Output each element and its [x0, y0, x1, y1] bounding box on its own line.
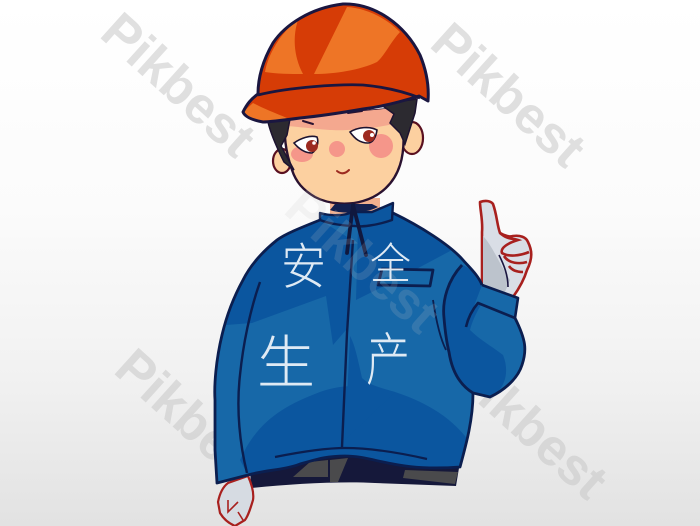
eyebrows [303, 111, 362, 124]
chest lettering 安全生产 [257, 226, 411, 400]
character 安: 安 [281, 226, 326, 299]
helmet highlight: centre [314, 7, 400, 74]
left eye [294, 136, 318, 153]
helmet brim line [258, 85, 420, 98]
trouser highlights [293, 458, 458, 484]
glove shadow [483, 236, 510, 292]
left ear [273, 149, 291, 173]
jacket outline [215, 213, 482, 483]
watermark: bottom right: Pikbest [442, 344, 618, 511]
right ear [401, 122, 423, 154]
helmet highlight: left [265, 20, 303, 74]
character 产: 产 [366, 314, 410, 397]
blush: left cheek [291, 146, 313, 162]
cuff [466, 285, 518, 327]
centre zip [342, 240, 353, 447]
right eye [350, 128, 377, 143]
chest pocket [378, 269, 433, 286]
watermark: top right: Pikbest [420, 12, 596, 179]
jacket shading: lower band [240, 386, 468, 475]
character 生: 生 [257, 316, 315, 400]
watermark: top left: Pikbest [90, 2, 266, 169]
jacket [215, 203, 525, 483]
glove fingers [500, 233, 529, 272]
nose blush [329, 141, 345, 157]
hair: right [380, 99, 417, 144]
trousers [250, 452, 460, 488]
helmet highlight: brim [243, 103, 287, 122]
neck [330, 198, 380, 214]
drawstring [347, 205, 366, 255]
blush: right cheek [369, 134, 393, 158]
collar [320, 203, 393, 226]
hair: left [268, 119, 294, 170]
helmet outline [243, 4, 428, 122]
mouth [337, 170, 349, 173]
right sleeve [433, 265, 525, 397]
jacket shading: sleeve [445, 265, 506, 397]
character 全: 全 [370, 230, 411, 292]
left sleeve line [238, 282, 260, 473]
jacket shading: left shoulder [226, 220, 352, 345]
jacket hem line [275, 448, 427, 459]
left glove [218, 476, 253, 526]
right glove thumbs up [480, 201, 531, 297]
watermark: bottom left: Pikbest [104, 338, 280, 505]
jacket shading: right shoulder [356, 213, 452, 300]
face [285, 108, 404, 204]
helmet shadow on face [287, 108, 395, 130]
watermark: centre: Pikbest [274, 178, 450, 345]
helmet [243, 4, 428, 122]
jacket shading: centre panel [345, 336, 395, 440]
